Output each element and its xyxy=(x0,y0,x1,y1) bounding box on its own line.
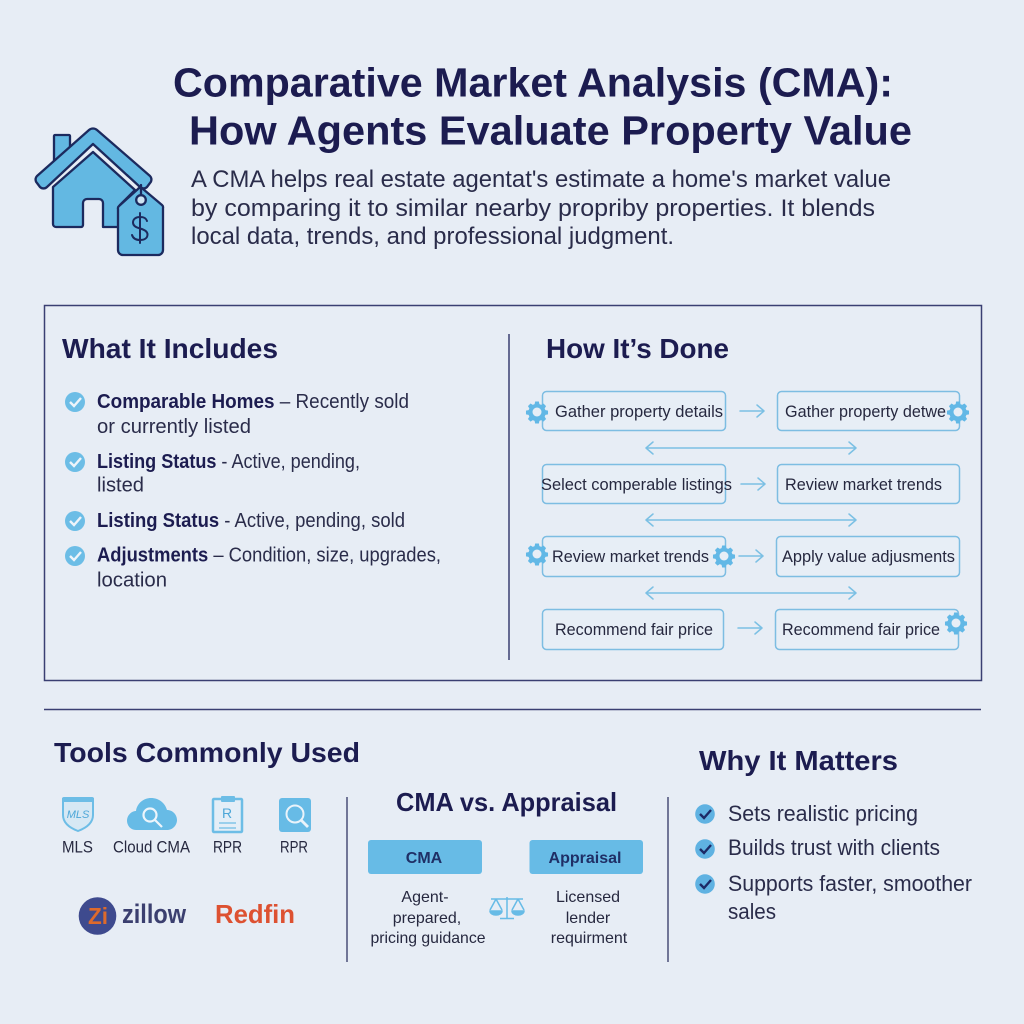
benefit list: Supports faster, smoother xyxy=(728,871,972,896)
flow labels: Gather property detwe xyxy=(785,403,946,421)
checklist items: listed xyxy=(97,474,144,496)
flow labels: Recommend fair price xyxy=(555,621,713,639)
checklist items: or currently listed xyxy=(97,416,251,438)
intro text: local data, trends, and professional judgment. xyxy=(191,223,674,250)
intro text xyxy=(191,166,891,250)
icon: house with price tag xyxy=(36,128,163,255)
logo: zillow: zillow xyxy=(122,899,187,929)
icon: RPR search xyxy=(279,798,311,832)
heading: how it's done: How It’s Done xyxy=(546,333,729,364)
title: Comparative Market Analysis (CMA): xyxy=(173,60,893,106)
CMA description: prepared, xyxy=(393,910,461,927)
appraisal badge xyxy=(530,840,643,874)
flow labels: Apply value adjusments xyxy=(782,548,955,566)
appraisal description: lender xyxy=(566,910,611,927)
benefit list: sales xyxy=(728,899,776,924)
flow labels xyxy=(541,403,955,639)
CMA description xyxy=(370,889,486,947)
checklist items: location xyxy=(97,570,167,592)
benefit list: Builds trust with clients xyxy=(728,835,940,860)
tool labels: Cloud CMA xyxy=(113,838,191,856)
flow boxes xyxy=(542,392,960,650)
tool labels xyxy=(62,838,308,856)
CMA badge: CMA xyxy=(406,850,443,867)
column dividers xyxy=(347,797,668,962)
intro text: by comparing it to similar nearby propriby properties. It blends xyxy=(191,195,875,222)
appraisal description xyxy=(551,889,628,947)
flow labels: Review market trends xyxy=(552,548,709,566)
title xyxy=(173,60,912,154)
checklist items: Adjustments – Condition, size, upgrades, xyxy=(97,544,441,566)
icon: RPR clipboard: R xyxy=(222,805,232,821)
flow labels: Recommend fair price xyxy=(782,621,940,639)
tool labels: MLS xyxy=(62,838,93,856)
checklist items: Listing Status - Active, pending, xyxy=(97,451,360,473)
CMA description: Agent- xyxy=(401,889,449,906)
title: How Agents Evaluate Property Value xyxy=(189,108,912,154)
tool labels: RPR xyxy=(280,838,308,856)
tool labels: RPR xyxy=(213,838,242,856)
logo: redfin: Redfin xyxy=(215,899,295,929)
panel: main frame xyxy=(44,306,982,680)
flow arrows xyxy=(646,405,856,634)
icon: MLS shield: MLS xyxy=(67,809,90,821)
panel: tools commonly used xyxy=(54,737,360,935)
panel: how it's done xyxy=(526,333,969,650)
heading: why it matters: Why It Matters xyxy=(699,745,898,776)
CMA description: pricing guidance xyxy=(370,930,486,947)
appraisal description: requirment xyxy=(551,930,628,947)
heading: CMA vs appraisal: CMA vs. Appraisal xyxy=(396,787,617,817)
divider xyxy=(44,708,981,710)
flow labels: Select comperable listings xyxy=(541,476,732,494)
gear icons xyxy=(526,402,969,635)
heading: what it includes: What It Includes xyxy=(62,333,278,364)
appraisal badge: Appraisal xyxy=(549,850,621,867)
checklist items xyxy=(65,391,441,592)
checklist items: Listing Status - Active, pending, sold xyxy=(97,510,405,532)
benefit list: Sets realistic pricing xyxy=(728,801,918,826)
panel: why it matters xyxy=(695,745,972,924)
logo: zillow xyxy=(79,897,187,935)
CMA badge xyxy=(368,840,482,874)
flow labels: Gather property details xyxy=(555,403,723,421)
heading: tools: Tools Commonly Used xyxy=(54,737,360,768)
icon: RPR clipboard xyxy=(213,796,242,832)
appraisal description: Licensed xyxy=(556,889,620,906)
panel: CMA vs appraisal xyxy=(368,787,643,947)
checklist items: Comparable Homes – Recently sold xyxy=(97,391,409,413)
panel: what it includes xyxy=(62,333,441,592)
logo: zillow: Zi xyxy=(88,903,108,929)
intro text: A CMA helps real estate agentat's estimate a home's market value xyxy=(191,166,891,193)
benefit list xyxy=(695,801,972,924)
icon: scales xyxy=(490,897,524,918)
flow labels: Review market trends xyxy=(785,476,942,494)
icon: MLS shield xyxy=(62,797,94,831)
icon: cloud xyxy=(127,798,177,830)
